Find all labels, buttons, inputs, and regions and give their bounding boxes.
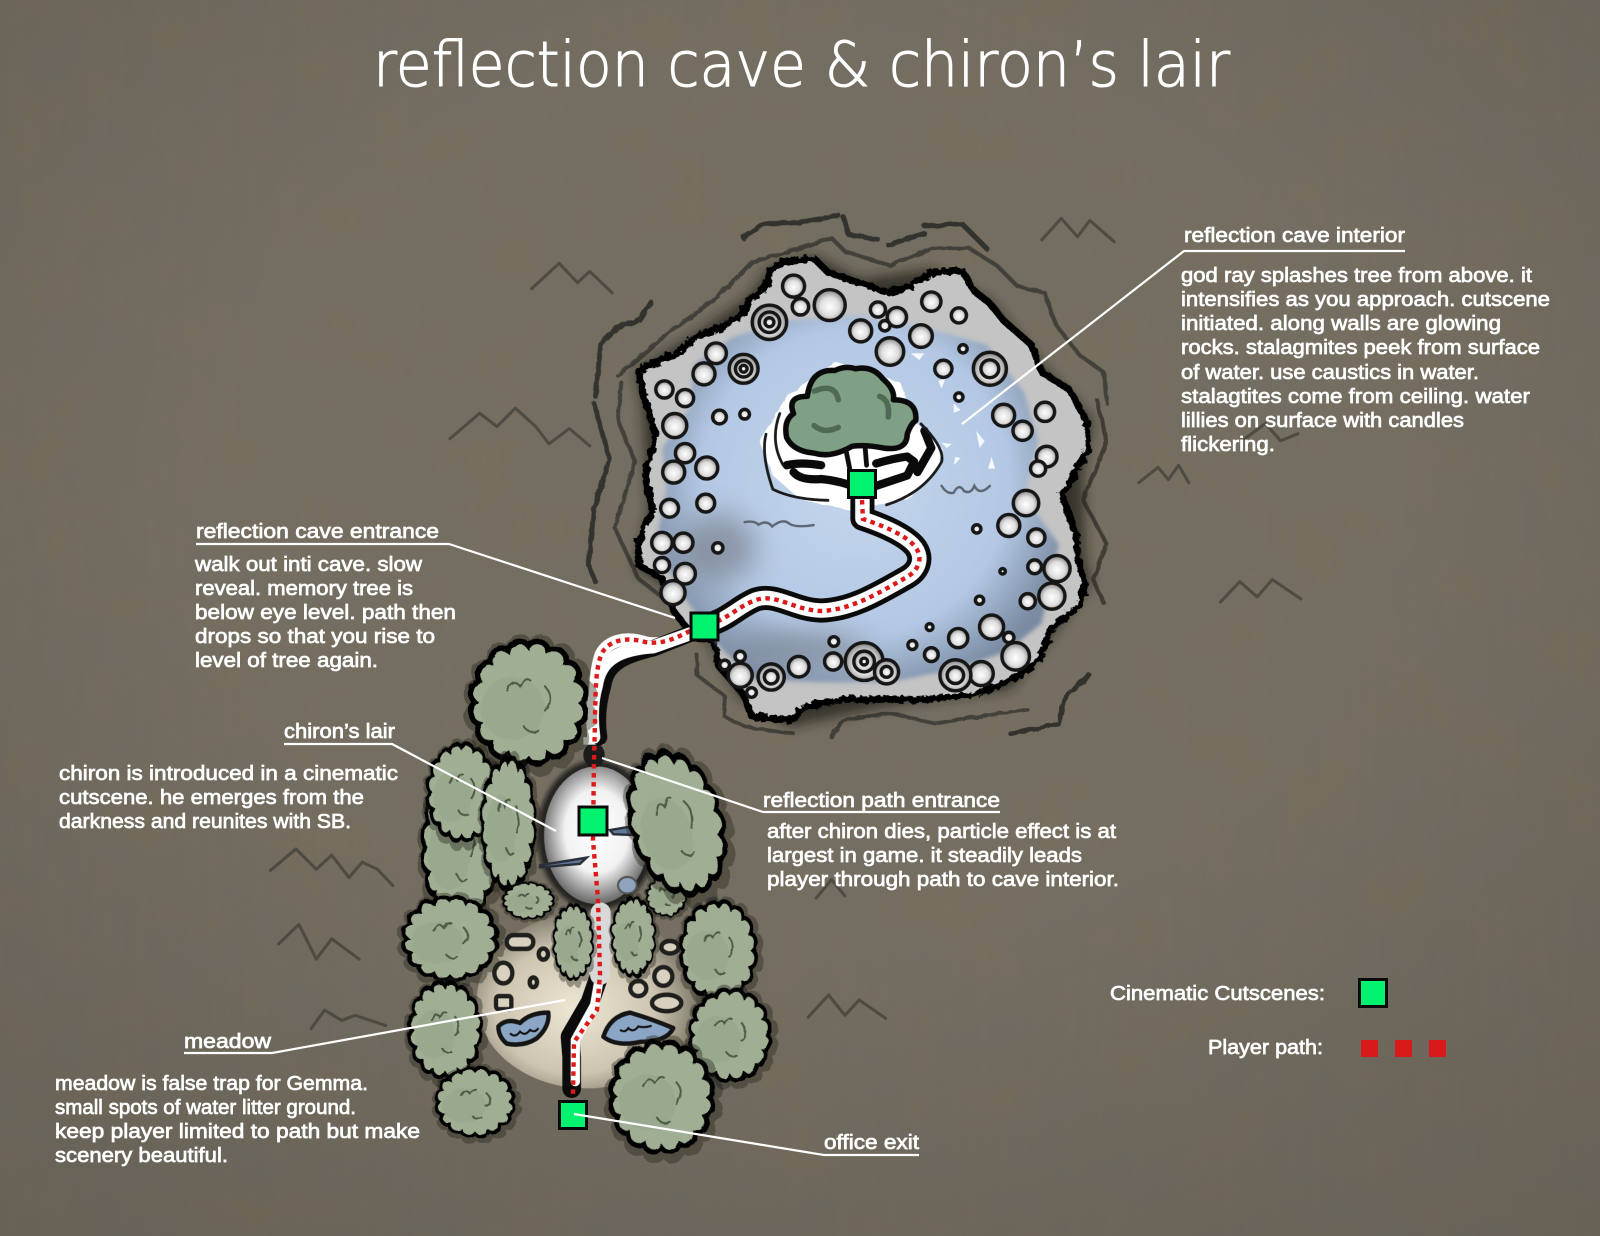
callout: office exit	[574, 1114, 919, 1155]
callout: reflection cave entrance: reflection cave entrance	[196, 521, 439, 543]
exit path	[570, 634, 690, 1088]
map: reflection cave	[589, 215, 1107, 740]
callout: reflection cave interior: of water. use caustics in water.	[1181, 362, 1479, 384]
callout: meadow: scenery beautiful.	[55, 1145, 228, 1167]
foreground trees	[398, 634, 778, 1163]
callout: reflection path entrance: after chiron dies, particle effect is at	[767, 821, 1116, 843]
meadow clearing	[477, 913, 697, 1088]
tree foliage	[786, 367, 916, 455]
cave drop shadow	[635, 255, 1093, 727]
callout: reflection cave entrance	[194, 521, 675, 672]
callout: office exit: office exit	[824, 1132, 919, 1154]
background hill sketches	[270, 218, 1301, 1029]
water shadow smudges	[680, 513, 869, 663]
callout: reflection path entrance: reflection path entrance	[763, 790, 1000, 812]
callout: chiron's lair: chiron’s lair	[284, 721, 395, 743]
callout: reflection path entrance	[602, 758, 1119, 891]
map: chiron's lair and meadow	[398, 634, 778, 1163]
callout: reflection cave interior: reflection cave interior	[1184, 225, 1405, 247]
callout: reflection cave entrance: drops so that you rise to	[195, 626, 435, 648]
cave rock floor	[639, 259, 1088, 720]
callout: meadow: keep player limited to path but make	[55, 1121, 420, 1143]
callout: reflection cave interior: god ray splashes tree from above. it	[1181, 265, 1532, 287]
chiron's lair chamber	[537, 737, 656, 910]
callout: reflection path entrance: largest in game. it steadily leads	[767, 845, 1082, 867]
callout: reflection cave interior: intensifies as you approach. cutscene	[1181, 289, 1550, 311]
callout: meadow: small spots of water litter ground.	[55, 1097, 356, 1119]
player path red dots	[573, 500, 919, 1095]
callout: reflection cave interior: stalagtites come from ceiling. water	[1181, 386, 1530, 408]
callout: chiron's lair: cutscene. he emerges from the	[59, 787, 364, 809]
callout: reflection path entrance: player through path to cave interior.	[767, 869, 1119, 891]
callout: reflection cave interior: lillies on surface with candles	[1181, 410, 1464, 432]
puddle ripples	[510, 1026, 652, 1035]
title: reflection cave & chiron’s lair	[373, 28, 1230, 101]
callout: reflection cave interior: flickering.	[1181, 434, 1275, 456]
callout: chiron's lair: chiron is introduced in a cinematic	[59, 763, 398, 785]
meadow rocks	[494, 935, 681, 1011]
rocks around the pool	[652, 275, 1070, 697]
water pool	[656, 315, 1059, 682]
callout: meadow: meadow is false trap for Gemma.	[55, 1073, 368, 1095]
callout: reflection cave interior: rocks. stalagmites peek from surface	[1181, 337, 1540, 359]
callout: reflection cave interior: initiated. along walls are glowing	[1181, 313, 1501, 335]
callout: meadow: meadow	[184, 1031, 272, 1053]
god ray light shards	[911, 353, 995, 469]
callout: reflection cave entrance: walk out inti cave. slow	[194, 554, 423, 576]
back trees	[418, 738, 690, 932]
cutscene markers	[560, 470, 876, 1128]
path: tree to cave entrance	[593, 500, 919, 740]
callout: chiron's lair: darkness and reunites with SB.	[59, 811, 351, 833]
ripple marks	[745, 486, 990, 526]
callout: reflection cave entrance: reveal. memory tree is	[195, 578, 413, 600]
callout: meadow	[55, 1000, 565, 1167]
cave outer contour sketch lines	[589, 215, 1107, 737]
meadow puddles	[498, 1013, 673, 1045]
callout: chiron's lair	[59, 721, 556, 833]
legend: Cinematic Cutscenes:	[1110, 983, 1325, 1005]
callout: reflection cave interior	[962, 225, 1550, 456]
memory tree island	[759, 362, 942, 510]
callout: reflection cave entrance: below eye level. path then	[195, 602, 456, 624]
legend: Player path:	[1208, 1037, 1323, 1059]
legend	[1110, 980, 1446, 1059]
callout: reflection cave entrance: level of tree again.	[195, 650, 378, 672]
